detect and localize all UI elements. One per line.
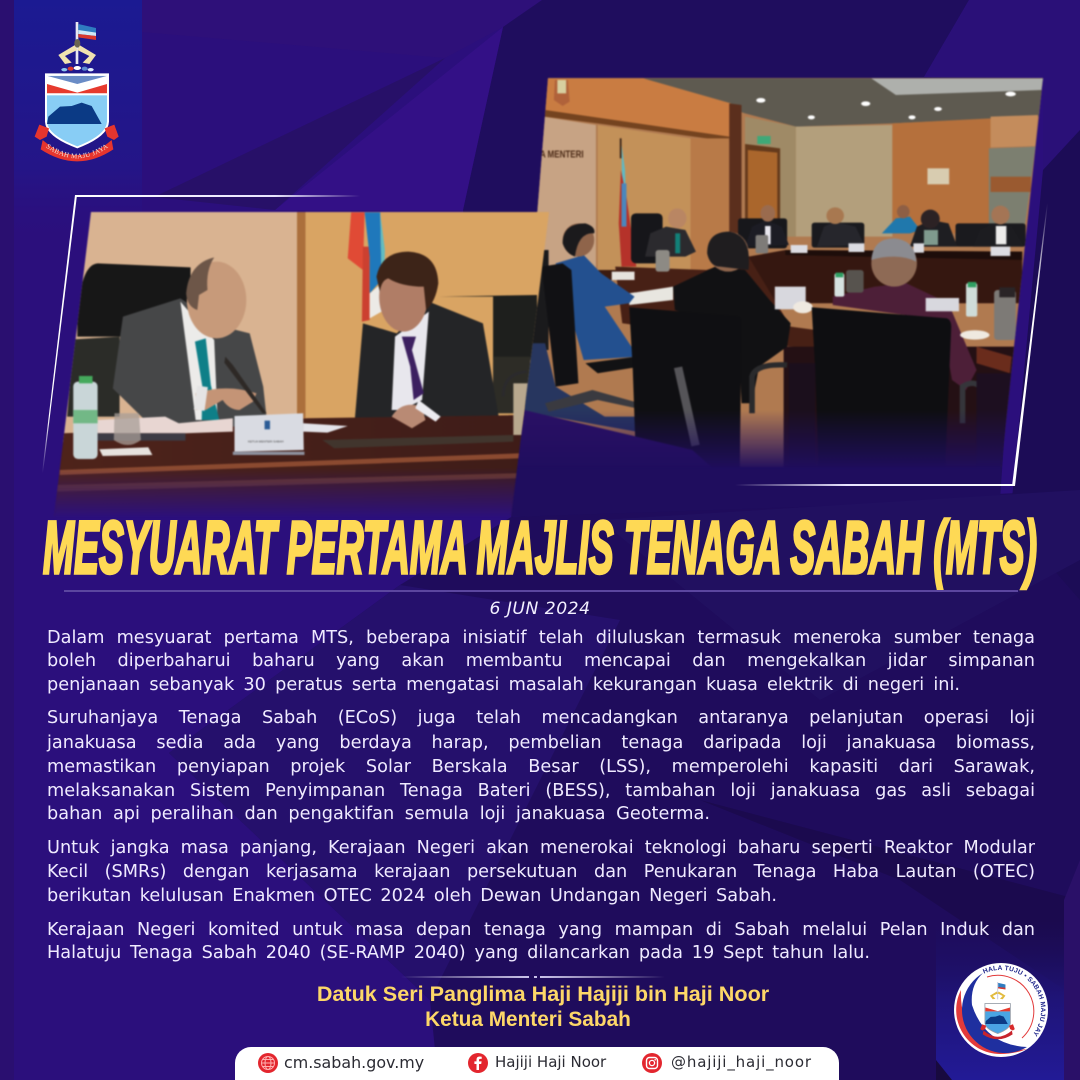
signatory name: Datuk Seri Panglima Haji Hajiji bin Haji Noor <box>317 981 769 1006</box>
facebook name: Hajiji Haji Noor <box>495 1053 606 1071</box>
text: boleh diperbaharui baharu yang akan membantu mencapai dan mengekalkan jidar simpanan <box>47 651 1035 671</box>
logo: Hala Tuju Sabah Maju Jaya: HALA TUJU • SABAH MAJU JAYA <box>982 965 1046 1037</box>
photo: wide view of the meeting room: A MENTERI <box>540 150 584 161</box>
text: Dalam mesyuarat pertama MTS, beberapa inisiatif telah diluluskan termasuk meneroka sumber tenaga <box>47 628 1035 648</box>
text: Kecil (SMRs) dengan kerjasama kerajaan persekutuan dan Penukaran Tenaga Haba Lautan (OTEC) <box>47 862 1035 882</box>
text: berikutan kelulusan Enakmen OTEC 2024 oleh Dewan Undangan Negeri Sabah. <box>47 886 777 906</box>
instagram handle: @hajiji_haji_noor <box>671 1053 812 1071</box>
icon: website globe <box>258 1053 278 1073</box>
text: melaksanakan Sistem Penyimpanan Tenaga Bateri (BESS), tambahan loji janakuasa gas asli sebagai <box>47 781 1035 801</box>
text: Halatuju Tenaga Sabah 2040 (SE-RAMP 2040) yang dilancarkan pada 19 Sept tahun lalu. <box>47 943 870 963</box>
photo: two officials at the desk: KETUA MENTERI SABAH <box>248 439 284 443</box>
text: Suruhanjaya Tenaga Sabah (ECoS) juga telah mencadangkan antaranya pelanjutan operasi loji <box>47 708 1035 728</box>
photo: wide view of the meeting room <box>522 77 1044 466</box>
website address: cm.sabah.gov.my <box>284 1053 424 1072</box>
footer contact bar <box>235 1047 839 1080</box>
title underline rule <box>64 590 1018 592</box>
signatory position: Ketua Menteri Sabah <box>425 1008 631 1031</box>
date: 6 JUN 2024 <box>489 599 591 619</box>
text: Kerajaan Negeri komited untuk masa depan tenaga yang mampan di Sabah melalui Pelan Induk dan <box>47 920 1035 940</box>
icon: facebook <box>468 1053 488 1073</box>
text: bahan api peralihan dan pengaktifan semula loji janakuasa Geoterma. <box>47 804 710 824</box>
text: Untuk jangka masa panjang, Kerajaan Negeri akan menerokai teknologi baharu seperti Reaktor Modular <box>47 838 1035 858</box>
text: memastikan penyiapan projek Solar Berskala Besar (LSS), memperolehi kapasiti dari Sarawak, <box>47 757 1035 777</box>
text: penjanaan sebanyak 30 peratus serta mengatasi masalah kekurangan kuasa elektrik di negeri ini. <box>47 675 960 695</box>
icon: instagram <box>642 1053 662 1073</box>
text: janakuasa sedia ada yang berdaya harap, pembelian tenaga daripada loji janakuasa biomass, <box>47 733 1035 753</box>
emblem: Sabah state crest: SABAH MAJU JAYA <box>46 144 108 158</box>
body text <box>46 628 1036 963</box>
photo: two officials at the desk <box>54 211 550 515</box>
